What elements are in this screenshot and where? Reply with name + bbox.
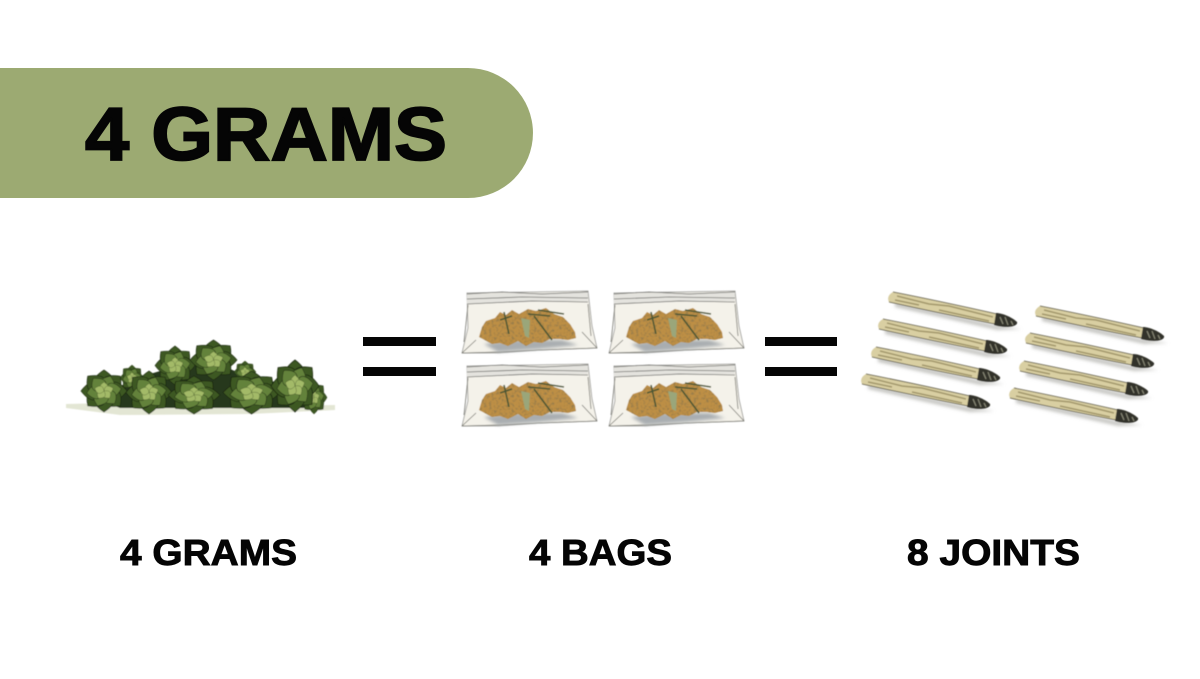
illustration: four bags [462,291,744,426]
buds [81,340,327,414]
illustration: pile of cannabis buds [66,340,335,415]
illustration: eight joints [861,292,1168,426]
label: 4 bags: 4 BAGS [529,532,672,573]
equals sign 2 [765,337,837,376]
label: 8 joints: 8 JOINTS [907,532,1080,573]
equals sign 1 [363,337,436,376]
label: 4 grams: 4 GRAMS [120,532,297,573]
dark base of the pile [100,362,318,408]
title banner [0,68,533,198]
ground shadow [66,403,335,415]
title text: 4 GRAMS [85,92,447,176]
